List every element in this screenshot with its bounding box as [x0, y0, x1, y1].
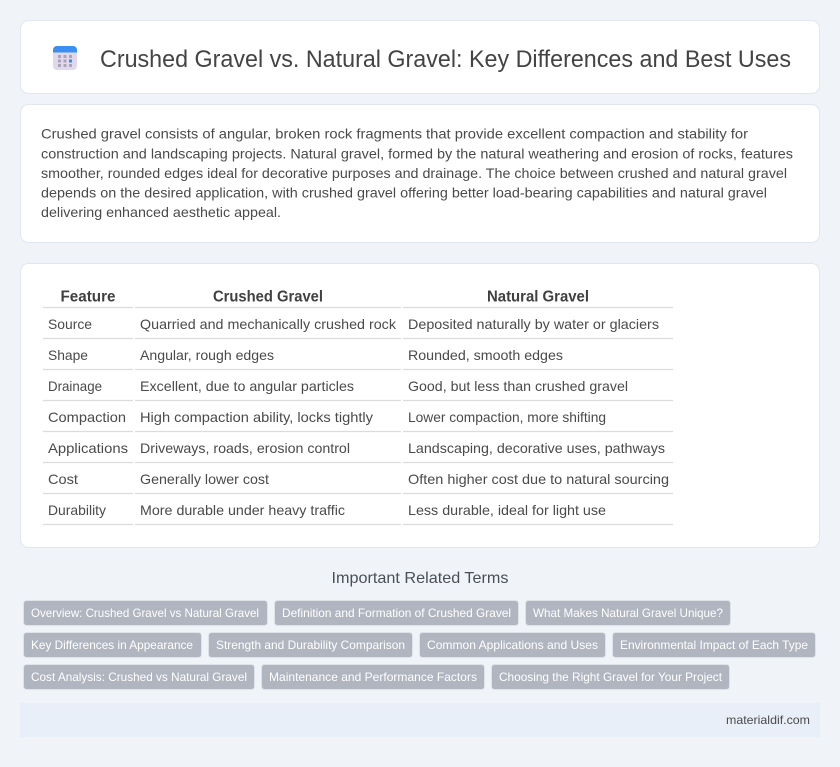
chip	[492, 664, 730, 690]
heading: important related terms: Important Related Terms	[332, 570, 508, 587]
chip	[274, 600, 518, 626]
chip: Cost Analysis: Crushed vs Natural Gravel	[31, 670, 247, 684]
footer source: materialdif.com	[726, 713, 810, 727]
row: durability: More durable under heavy traffic	[140, 502, 345, 518]
panel: introduction	[20, 104, 820, 242]
row: cost: Generally lower cost	[140, 471, 269, 487]
chip	[24, 632, 202, 658]
icon: calendar	[53, 46, 77, 70]
text block: introduction paragraph: depends on the desired application, with crushed gravel offering better load-bearing capabilities and natural gravel	[41, 184, 767, 200]
row: cost	[48, 471, 669, 487]
panel: comparison table	[20, 264, 820, 548]
table header	[60, 288, 589, 306]
chip: Environmental Impact of Each Type	[620, 638, 808, 652]
row: drainage	[48, 378, 628, 394]
row: applications: Driveways, roads, erosion control	[140, 440, 350, 456]
row: cost: Cost	[48, 471, 78, 487]
related terms chips	[24, 600, 816, 690]
chip: Key Differences in Appearance	[31, 638, 193, 652]
row: applications: Landscaping, decorative uses, pathways	[408, 440, 665, 456]
chip	[420, 632, 606, 658]
row: applications	[48, 440, 665, 456]
row: drainage: Drainage	[48, 378, 102, 394]
chip: Choosing the Right Gravel for Your Project	[499, 670, 723, 684]
row: compaction: Compaction	[48, 409, 126, 425]
row: shape: Shape	[48, 347, 88, 363]
row: source: Quarried and mechanically crushed rock	[140, 316, 397, 332]
row: drainage: Excellent, due to angular particles	[140, 378, 354, 394]
text block: introduction paragraph: delivering enhanced aesthetic appeal.	[41, 204, 281, 220]
row: shape: Angular, rough edges	[140, 347, 274, 363]
chip	[24, 600, 268, 626]
table grid lines	[43, 308, 673, 524]
row: compaction	[48, 409, 606, 425]
chip: Strength and Durability Comparison	[216, 638, 405, 652]
row: durability: Durability	[48, 502, 106, 518]
chip	[526, 600, 730, 626]
row: source	[48, 316, 659, 332]
row: shape: Rounded, smooth edges	[408, 347, 563, 363]
row: applications: Applications	[48, 440, 128, 456]
table header: Feature	[60, 288, 116, 306]
text block: introduction paragraph	[41, 126, 793, 220]
chip	[24, 664, 254, 690]
row: drainage: Good, but less than crushed gravel	[408, 378, 628, 394]
chip: Overview: Crushed Gravel vs Natural Gravel	[31, 606, 259, 620]
chip	[612, 632, 816, 658]
chip	[208, 632, 412, 658]
row: shape	[48, 347, 563, 363]
table header: Natural Gravel	[487, 288, 589, 306]
table header: Crushed Gravel	[213, 288, 323, 306]
row: compaction: Lower compaction, more shifting	[408, 409, 606, 425]
row: durability: Less durable, ideal for light use	[408, 502, 606, 518]
chip: Definition and Formation of Crushed Gravel	[282, 606, 511, 620]
chip	[262, 664, 484, 690]
row: compaction: High compaction ability, locks tightly	[140, 409, 373, 425]
row: durability	[48, 502, 606, 518]
footer	[20, 703, 820, 737]
row: source: Source	[48, 316, 92, 332]
chip: Maintenance and Performance Factors	[269, 670, 477, 684]
row: source: Deposited naturally by water or glaciers	[408, 316, 659, 332]
chip: What Makes Natural Gravel Unique?	[533, 606, 723, 620]
text block: introduction paragraph: Crushed gravel consists of angular, broken rock fragments that provide excellent compaction and stability for	[41, 126, 748, 142]
text block: introduction paragraph: smoother, rounded edges ideal for decorative purposes and drainage. The choice between crushed and natural gravel	[41, 165, 787, 181]
panel: header	[20, 20, 820, 94]
row: cost: Often higher cost due to natural sourcing	[408, 471, 669, 487]
text block: introduction paragraph: construction and landscaping projects. Natural gravel, formed by the natural weathering and erosion of rocks, features	[41, 146, 793, 162]
chip: Common Applications and Uses	[427, 638, 598, 652]
title: Crushed Gravel vs. Natural Gravel: Key Differences and Best Uses	[100, 46, 791, 73]
